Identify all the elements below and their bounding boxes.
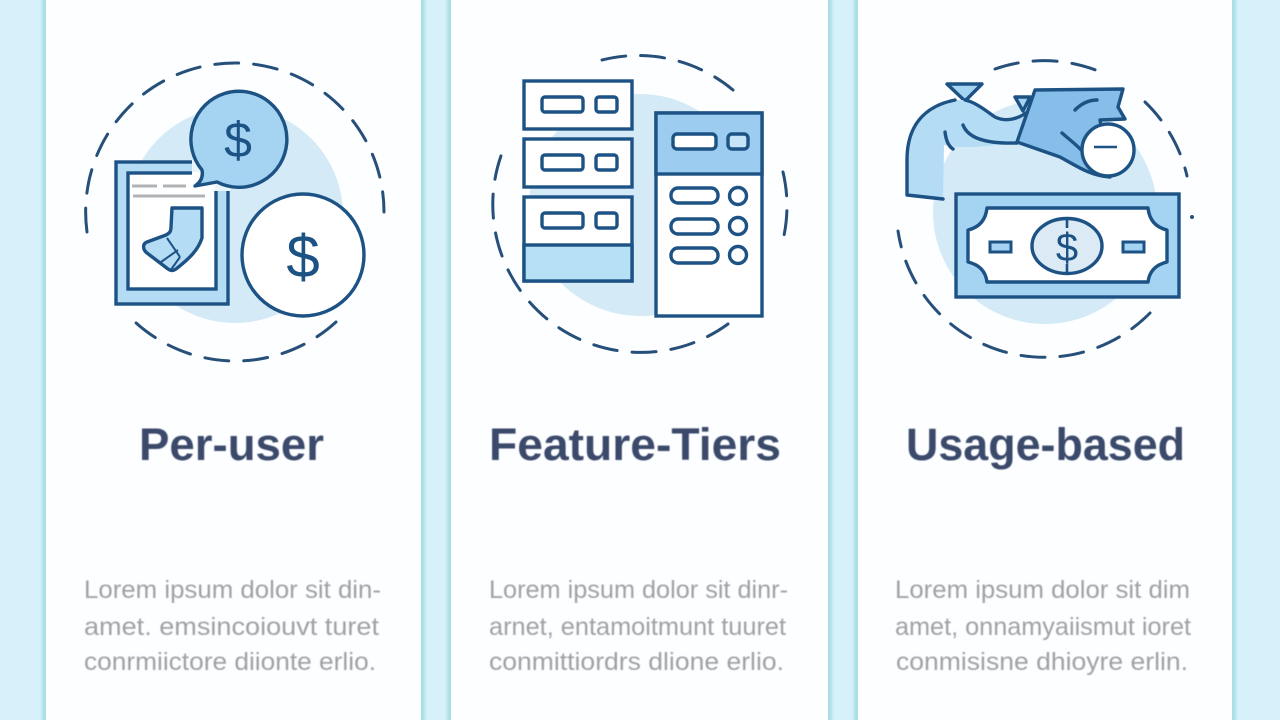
- text block: per-user description: [84, 576, 381, 676]
- heading: Usage-based: Usage-based: [906, 419, 1185, 470]
- panel: usage-based: [854, 0, 1236, 720]
- text block: usage-based description: [895, 576, 1191, 676]
- heading: Feature-Tiers: Feature-Tiers: [489, 419, 781, 470]
- text block: per-user description: Lorem ipsum dolor sit din-: [84, 576, 381, 604]
- panel: per-user: [42, 0, 425, 720]
- panel: feature-tiers: [447, 0, 832, 720]
- icon: usage-based pricing: [898, 61, 1194, 357]
- text block: usage-based description: conmisisne dhioyre erlin.: [896, 648, 1188, 676]
- icon: feature tiers: [493, 56, 787, 352]
- icon: usage-based pricing: $: [1056, 226, 1078, 270]
- text block: per-user description: amet. emsincoiouvt turet: [84, 613, 379, 641]
- heading: Per-user: Per-user: [139, 419, 324, 470]
- text block: feature-tiers description: conmittiordrs dlione erlio.: [489, 648, 784, 676]
- text block: usage-based description: Lorem ipsum dolor sit dim: [895, 576, 1190, 604]
- text block: feature-tiers description: [489, 576, 788, 676]
- text block: feature-tiers description: arnet, entamoitmunt tuuret: [489, 613, 786, 641]
- icon: per-user pricing: $: [286, 223, 320, 290]
- text block: usage-based description: amet, onnamyaiismut ioret: [895, 613, 1191, 641]
- text block: per-user description: conrmiictore diionte erlio.: [84, 648, 376, 676]
- icon: per-user pricing: [86, 63, 384, 361]
- icon: per-user pricing: $: [224, 112, 252, 168]
- text block: feature-tiers description: Lorem ipsum dolor sit dinr-: [489, 576, 788, 604]
